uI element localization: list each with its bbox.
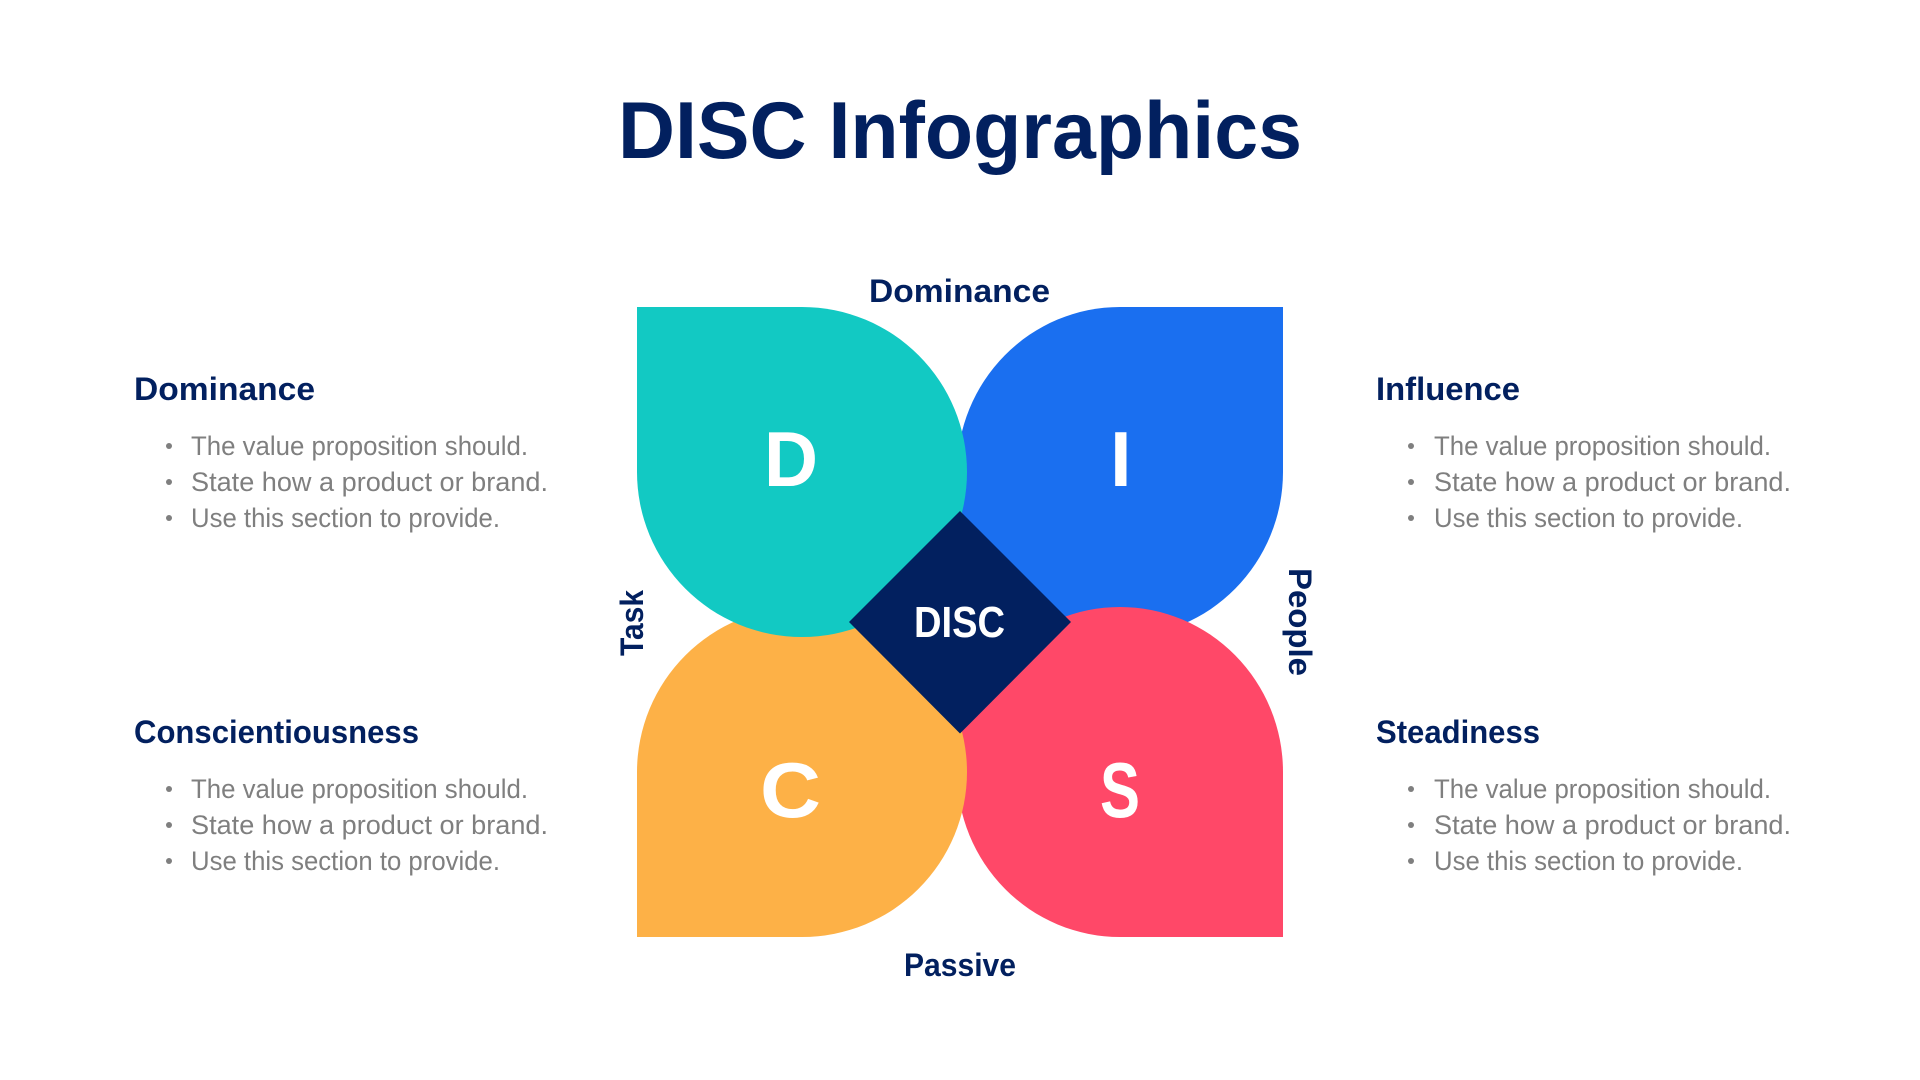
heading: Dominance: Dominance bbox=[134, 371, 315, 407]
bullet list: Influence: Use this section to provide. bbox=[1434, 503, 1743, 533]
axis label: left Task: Task bbox=[614, 590, 650, 656]
axis label: top Dominance: Dominance bbox=[869, 273, 1050, 309]
bullet list: Steadiness: Use this section to provide. bbox=[1434, 846, 1743, 876]
petal: D teal: D bbox=[764, 415, 818, 503]
center diamond: DISC bbox=[849, 511, 1071, 734]
petal: D teal bbox=[637, 307, 967, 637]
bullet list: Conscientiousness: The value proposition should. bbox=[191, 774, 528, 804]
panel: Influence description bbox=[1376, 371, 1791, 533]
heading: Influence: Influence bbox=[1376, 371, 1520, 407]
bullet list: Influence: The value proposition should. bbox=[1434, 431, 1771, 461]
bullet list: Dominance: The value proposition should. bbox=[191, 431, 528, 461]
bullet list: Conscientiousness: Use this section to provide. bbox=[191, 846, 500, 876]
bullet list: Dominance: State how a product or brand. bbox=[191, 467, 548, 497]
panel: Dominance description bbox=[134, 371, 548, 533]
bullet list: Influence bbox=[1408, 431, 1791, 533]
bullet list: Influence: State how a product or brand. bbox=[1434, 467, 1791, 497]
title: DISC Infographics bbox=[618, 86, 1302, 176]
panel: Steadiness description bbox=[1376, 714, 1791, 876]
heading: Steadiness: Steadiness bbox=[1376, 714, 1540, 750]
bullet list: Steadiness bbox=[1408, 774, 1791, 876]
petal: C orange: C bbox=[760, 746, 821, 834]
petal: C orange bbox=[637, 607, 967, 937]
panel: Conscientiousness description bbox=[134, 714, 548, 876]
bullet list: Dominance bbox=[166, 431, 548, 533]
heading: Conscientiousness: Conscientiousness bbox=[134, 714, 419, 750]
petal: I blue: I bbox=[1110, 415, 1132, 503]
center diamond: DISC: DISC bbox=[914, 598, 1005, 647]
bullet list: Steadiness: The value proposition should. bbox=[1434, 774, 1771, 804]
bullet list: Steadiness: State how a product or brand. bbox=[1434, 810, 1791, 840]
petal: S red: S bbox=[1100, 746, 1140, 834]
bullet list: Conscientiousness: State how a product or brand. bbox=[191, 810, 548, 840]
petal: S red bbox=[957, 607, 1283, 937]
bullet list: Dominance: Use this section to provide. bbox=[191, 503, 500, 533]
axis label: bottom Passive: Passive bbox=[904, 947, 1016, 983]
bullet list: Conscientiousness bbox=[166, 774, 548, 876]
petal: I blue bbox=[957, 307, 1283, 637]
axis label: right People: People bbox=[1282, 568, 1318, 676]
